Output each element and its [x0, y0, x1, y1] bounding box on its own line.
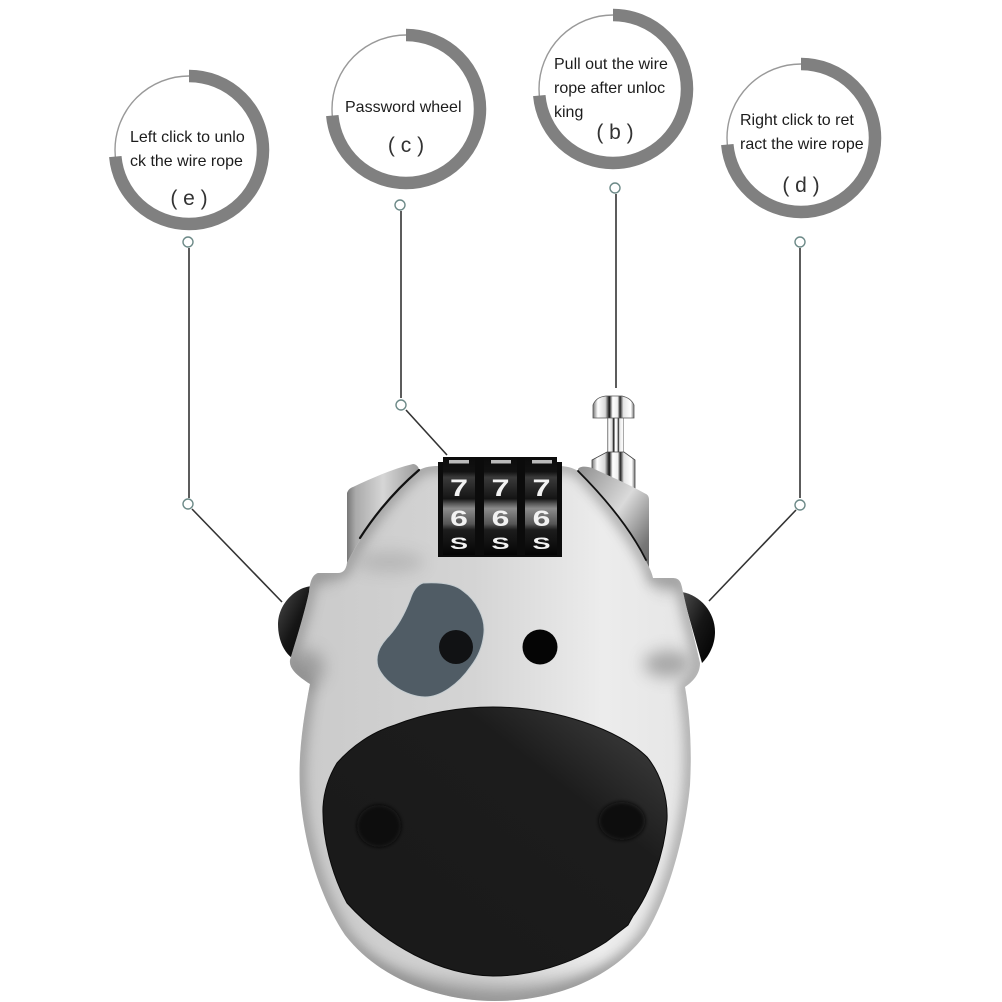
- label text: Pull out the wire: [554, 56, 668, 73]
- tag: ( e ): [170, 187, 208, 210]
- leader line d: [709, 237, 805, 601]
- label text: Left click to unlo: [130, 129, 245, 146]
- label text: ck the wire rope: [130, 153, 243, 170]
- label text: rope after unloc: [554, 80, 665, 97]
- cow patch: [377, 583, 484, 697]
- leader line e: [183, 237, 282, 602]
- leader line b: [610, 183, 620, 388]
- body shading: [288, 552, 692, 686]
- callout: left click to unlock (e): [115, 76, 263, 224]
- ring: [115, 76, 263, 224]
- right shoulder wing: [578, 467, 649, 568]
- left shoulder wing: [347, 464, 419, 563]
- wheel 2: 6: [492, 506, 509, 531]
- label text: Password wheel: [345, 99, 462, 116]
- wheel 2: [484, 458, 517, 555]
- tag: ( b ): [596, 121, 634, 144]
- wheel 3: 6: [533, 506, 550, 531]
- leader line c: [395, 200, 447, 455]
- wheel 3: S: [532, 533, 551, 553]
- bottom shadow: [368, 957, 624, 1001]
- password wheels: [438, 457, 562, 557]
- left eye: [439, 630, 473, 664]
- wheel 2: 7: [491, 475, 510, 502]
- label text: king: [554, 104, 583, 121]
- wheel 2: S: [491, 533, 510, 553]
- label text: ract the wire rope: [740, 136, 864, 153]
- wheel 1: [443, 458, 475, 555]
- callout: pull out the wire rope (b): [539, 15, 687, 163]
- edge shading: [290, 466, 700, 1001]
- wheel 3: [525, 458, 557, 555]
- tag: ( d ): [782, 174, 820, 197]
- left knob: [278, 586, 314, 658]
- ring: [727, 64, 875, 212]
- callout: password wheel (c): [332, 35, 480, 183]
- left nostril: [357, 805, 401, 847]
- ring: [332, 35, 480, 183]
- mouth pad: [323, 707, 667, 976]
- wheel 3: 7: [532, 475, 551, 502]
- wing edge lines: [360, 470, 646, 560]
- callout: right click to retract (d): [727, 64, 875, 212]
- wheel 1: 6: [450, 506, 468, 531]
- right nostril: [599, 802, 645, 840]
- right eye: [522, 630, 558, 664]
- ring: [539, 15, 687, 163]
- right knob: [682, 592, 715, 663]
- label text: Right click to ret: [740, 112, 854, 129]
- lock body: [280, 450, 710, 1002]
- wheel 1: 7: [450, 475, 468, 502]
- wire rope pin: [592, 396, 635, 490]
- wheel 1: S: [450, 533, 468, 553]
- tag: ( c ): [388, 134, 424, 157]
